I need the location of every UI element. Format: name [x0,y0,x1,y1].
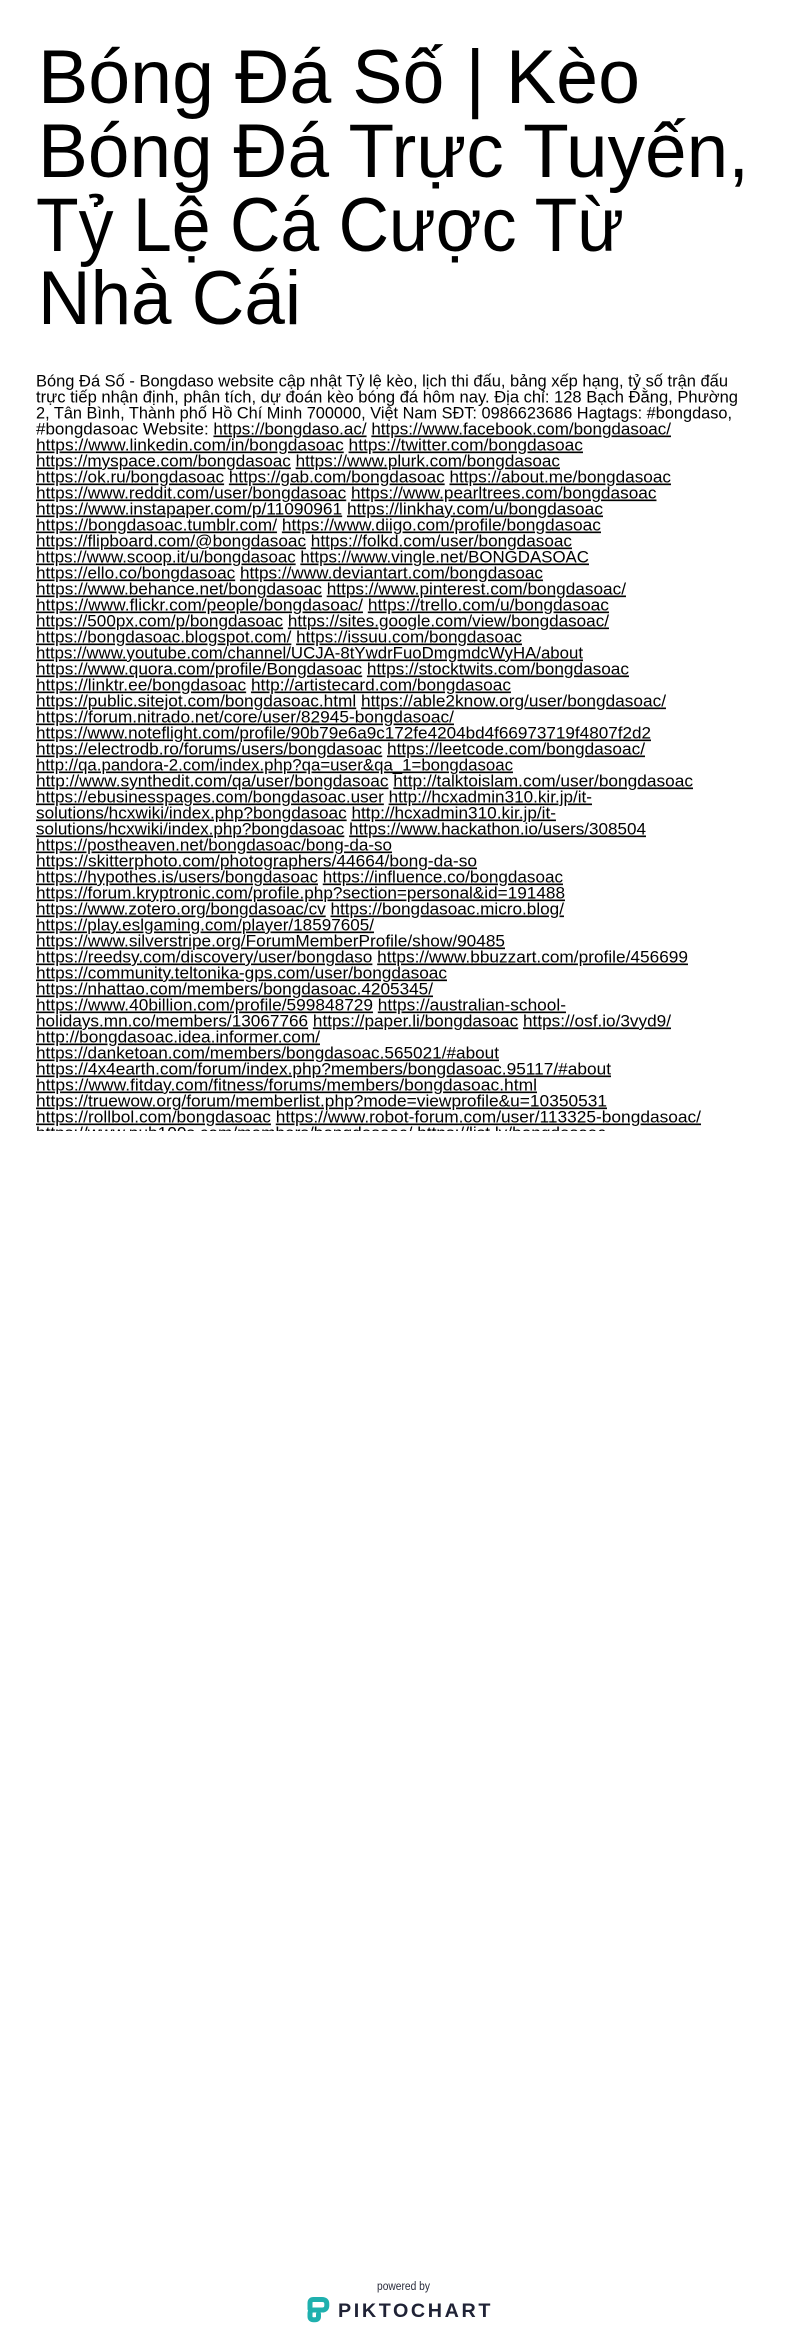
body text with links: https://www.40billion.com/profile/599848729 https://australian-school- [36,996,566,1014]
body text with links: https://postheaven.net/bongdasoac/bong-da-so [36,836,392,854]
body text with links: https://www.instapaper.com/p/11090961 https://linkhay.com/u/bongdasoac [36,500,603,518]
body text with links: https://ok.ru/bongdasoac https://gab.com/bongdasoac https://about.me/bongdasoac [36,468,671,486]
body text with links: https://www.flickr.com/people/bongdasoac/ https://trello.com/u/bongdasoac [36,596,609,614]
body text with links: https://www.scoop.it/u/bongdasoac https://www.vingle.net/BONGDASOAC [36,548,589,566]
body text with links: https://ello.co/bongdasoac https://www.deviantart.com/bongdasoac [36,564,543,582]
body text with links: https://forum.nitrado.net/core/user/82945-bongdasoac/ [36,708,454,726]
body text with links: https://forum.kryptronic.com/profile.php?section=personal&id=191488 [36,884,565,902]
body text with links: https://www.fitday.com/fitness/forums/members/bongdasoac.html [36,1076,537,1094]
body text with links: https://www.youtube.com/channel/UCJA-8tYwdrFuoDmgmdcWyHA/about [36,644,583,662]
body text with links: https://nhattao.com/members/bongdasoac.4205345/ [36,980,433,998]
body text with links: #bongdasoac Website: https://bongdaso.ac/ https://www.facebook.com/bongdasoac/ [36,420,671,438]
body text with links: https://www.pub100s.com/members/bongdasoac/ https://list.ly/bongdasoac [36,1124,606,1142]
body text with links: https://reedsy.com/discovery/user/bongdaso https://www.bbuzzart.com/profile/456699 [36,948,688,966]
title: Bóng Đá Số | Kèo [38,35,640,120]
body text with links: http://qa.pandora-2.com/index.php?qa=user&qa_1=bongdasoac [36,756,513,774]
body text with links: https://www.noteflight.com/profile/90b79e6a9c172fe4204bd4f66973719f4807f2d2 [36,724,651,742]
body text with links: https://truewow.org/forum/memberlist.php?mode=viewprofile&u=10350531 [36,1092,607,1110]
piktochart wordmark: PIKTOCHART [338,2301,493,2322]
body text with links: https://play.eslgaming.com/player/18597605/ [36,916,374,934]
body text with links: https://electrodb.ro/forums/users/bongdasoac https://leetcode.com/bongdasoac/ [36,740,645,758]
body text with links: Bóng Đá Số - Bongdaso website cập nhật Tỷ lệ kèo, lịch thi đấu, bảng xếp hạng, tỷ số trận đấu [36,372,728,390]
title: Tỷ Lệ Cá Cược Từ [36,183,624,268]
body text with links: 2, Tân Bình, Thành phố Hồ Chí Minh 700000, Việt Nam SĐT: 0986623686 Hagtags: #bongdaso, [36,404,732,422]
body text with links: https://ebusinesspages.com/bongdasoac.user http://hcxadmin310.kir.jp/it- [36,788,592,806]
body text with links: solutions/hcxwiki/index.php?bongdasoac http://hcxadmin310.kir.jp/it- [36,804,556,822]
body text with links: https://bongdasoac.tumblr.com/ https://www.diigo.com/profile/bongdasoac [36,516,601,534]
powered by label: powered by [377,2281,430,2293]
body text with links: https://danketoan.com/members/bongdasoac.565021/#about [36,1044,499,1062]
title: Nhà Cái [38,256,301,341]
body text with links: https://4x4earth.com/forum/index.php?members/bongdasoac.95117/#about [36,1060,611,1078]
body text with links: http://bongdasoac.idea.informer.com/ [36,1028,320,1046]
body text with links: https://www.zotero.org/bongdasoac/cv https://bongdasoac.micro.blog/ [36,900,564,918]
body text with links: https://bongdasoac.blogspot.com/ https://issuu.com/bongdasoac [36,628,522,646]
body text with links: https://www.quora.com/profile/Bongdasoac https://stocktwits.com/bongdasoac [36,660,629,678]
title [36,35,749,341]
body text with links: http://www.synthedit.com/qa/user/bongdasoac http://talktoislam.com/user/bongdasoac [36,772,693,790]
body text with links: solutions/hcxwiki/index.php?bongdasoac https://www.hackathon.io/users/308504 [36,820,646,838]
body text with links: https://500px.com/p/bongdasoac https://sites.google.com/view/bongdasoac/ [36,612,609,630]
body text with links: https://rollbol.com/bongdasoac https://www.robot-forum.com/user/113325-bongdasoac/ [36,1108,701,1126]
title: Bóng Đá Trực Tuyến, [38,109,749,194]
body text with links: https://myspace.com/bongdasoac https://www.plurk.com/bongdasoac [36,452,560,470]
body text with links: https://flipboard.com/@bongdasoac https://folkd.com/user/bongdasoac [36,532,572,550]
body text with links: https://www.behance.net/bongdasoac https://www.pinterest.com/bongdasoac/ [36,580,626,598]
body text with links: https://www.reddit.com/user/bongdasoac https://www.pearltrees.com/bongdasoac [36,484,656,502]
body text with links: trực tiếp nhận định, phân tích, dự đoán kèo bóng đá hôm nay. Địa chỉ: 128 Bạch Đằng, Phường [36,388,738,406]
body text with links: https://www.linkedin.com/in/bongdasoac https://twitter.com/bongdasoac [36,436,583,454]
body text with links: https://linktr.ee/bongdasoac http://artistecard.com/bongdasoac [36,676,511,694]
body text with links: https://skitterphoto.com/photographers/44664/bong-da-so [36,852,477,870]
body text with links: https://public.sitejot.com/bongdasoac.html https://able2know.org/user/bongdasoac/ [36,692,666,710]
body text with links: https://www.silverstripe.org/ForumMemberProfile/show/90485 [36,932,505,950]
body text with links: https://hypothes.is/users/bongdasoac https://influence.co/bongdasoac [36,868,563,886]
body text with links: holidays.mn.co/members/13067766 https://paper.li/bongdasoac https://osf.io/3vyd9/ [36,1012,671,1030]
icon: piktochart logo mark [310,2300,327,2320]
body text with links [36,372,738,1142]
body text with links: https://community.teltonika-gps.com/user/bongdasoac [36,964,447,982]
